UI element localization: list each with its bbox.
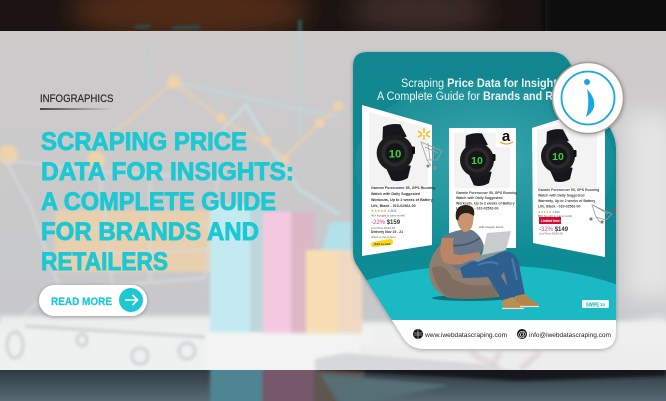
- contact: website: [413, 329, 507, 339]
- label: infographics: INFOGRAPHICS: [40, 93, 114, 105]
- card title: [377, 78, 559, 103]
- torso: [441, 230, 484, 270]
- panel: third product: ★★★★★ 4,806: [538, 210, 560, 214]
- contact: email: info@iwebdatascraping.com: [529, 332, 611, 339]
- panel: walmart product: Delivery Nov 19 - 21: [371, 230, 403, 234]
- card teal background: [353, 52, 616, 320]
- label: infographics: [40, 93, 114, 110]
- icon: walmart spark: [418, 128, 430, 140]
- laptop: [472, 231, 511, 262]
- cart contents: [55, 210, 215, 272]
- panel: third product: List Price $199.99: [539, 232, 563, 236]
- bean bag: [429, 244, 507, 299]
- arm: [440, 238, 481, 265]
- read more button: [39, 285, 147, 316]
- icon: arrow: [119, 288, 143, 312]
- panel: walmart product: Watch with Daily Suggested: [371, 192, 421, 196]
- chart lines: [115, 31, 340, 215]
- icon: amazon logo: a: [502, 128, 511, 145]
- title: DATA FOR INSIGHTS:: [41, 158, 294, 186]
- add to cart button: Add to cart: [374, 242, 390, 246]
- panel: walmart product: -22% $159: [371, 220, 401, 226]
- title: A COMPLETE GUIDE: [41, 188, 276, 216]
- panel: third product: Watch with Daily Suggested: [538, 194, 585, 198]
- panel: amazon product: Life, Black - 010-02562-00: [456, 206, 498, 210]
- panel: amazon product: Garmin Forerunner 55, GPS Running: [456, 191, 517, 195]
- panel: walmart product: Garmin Forerunner 55, GPS Running: [371, 186, 436, 190]
- panel: amazon product: [449, 128, 517, 248]
- logo badge: [552, 62, 624, 134]
- panel: amazon product: Workouts, Up to 2 weeks of Battery: [456, 202, 515, 206]
- panel: third product: Warranty, Up to 2 weeks of Battery: [538, 199, 595, 203]
- add to cart button: [371, 239, 393, 247]
- panel: walmart product: ★★★★★ 4,806: [371, 209, 396, 213]
- shoes: [515, 294, 539, 307]
- panel: amazon product: ★★★★: [456, 211, 468, 215]
- cart frame: [5, 160, 218, 318]
- contact: email: [517, 329, 611, 339]
- title: SCRAPING PRICE: [41, 128, 247, 156]
- panel: walmart product: Workouts, Up to 2 weeks of Battery: [371, 198, 434, 202]
- icon: cart: [421, 142, 442, 169]
- deal badge: Limited time deal: [541, 219, 567, 223]
- panel: third product: Life, Black - 010-02562-00: [538, 204, 580, 208]
- laptop silhouette: [314, 352, 510, 370]
- legs: [460, 252, 525, 302]
- icon: cart: [590, 205, 616, 223]
- panel: walmart product: Ships to Anywhere: [371, 235, 396, 239]
- panel: walmart product: [362, 105, 442, 256]
- panel: amazon product: Watch with Daily Suggested: [456, 196, 503, 200]
- infographic card: [350, 50, 618, 352]
- background photo: top dark strip: [0, 0, 666, 31]
- panel: walmart product: List Price $199.99: [371, 226, 395, 230]
- panel: third product: [532, 105, 616, 257]
- panel: third product: -32% $149: [539, 227, 569, 233]
- background photo: bottom dark strip: [0, 370, 666, 401]
- contact: email: @: [518, 329, 526, 339]
- panel: third product: 800 bought in past month: [538, 214, 572, 218]
- panel: walmart product: Life, Black - 010-02562-00: [371, 204, 416, 208]
- swipe button: [582, 300, 609, 308]
- person on bean bag: [429, 205, 539, 309]
- title: [41, 128, 294, 276]
- shopping bags: [210, 205, 252, 333]
- swipe button: SWIPE >>: [586, 302, 605, 308]
- card title: Scraping Price Data for Insight: [401, 78, 557, 90]
- title: RETAILERS: [41, 248, 168, 276]
- title: FOR BRANDS AND: [41, 218, 259, 246]
- card title: A Complete Guide for Brands and Re: [377, 91, 559, 103]
- deal badge: [539, 217, 567, 224]
- contact: website: www.iwebdatascraping.com: [424, 332, 507, 339]
- cart wheels: [7, 326, 205, 364]
- panel: walmart product: 40+ bought in past month: [371, 214, 405, 218]
- read more button: READ MORE: [51, 296, 112, 308]
- card floor: [366, 266, 616, 349]
- panel: third product: Garmin Forerunner 55, GPS Running: [538, 188, 599, 192]
- panel: amazon product: with coupon terms: [479, 225, 504, 229]
- blurred person right side: [625, 110, 666, 300]
- head: [456, 205, 474, 232]
- table surface: [0, 320, 666, 370]
